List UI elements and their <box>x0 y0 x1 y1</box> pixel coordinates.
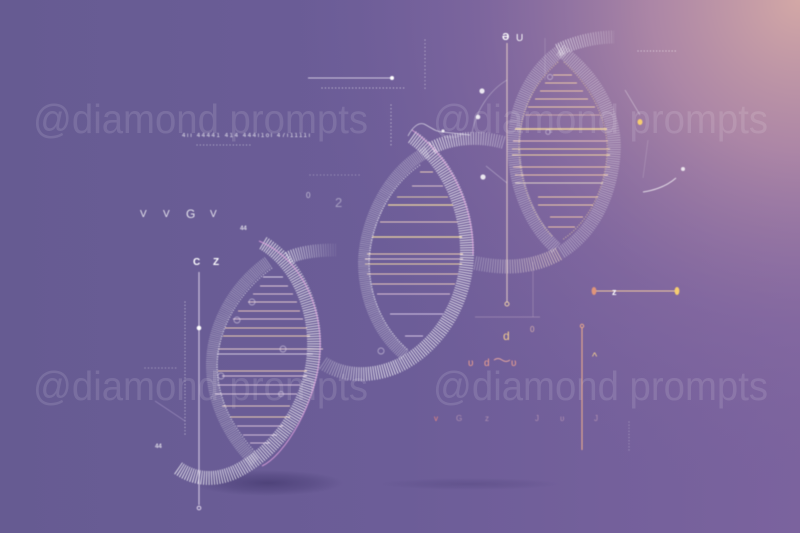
gene range bar: z <box>612 287 617 297</box>
small labels: 0 <box>306 191 311 200</box>
floor shadows <box>193 470 560 496</box>
lower right annotations: υ <box>560 414 564 423</box>
small labels: 44 <box>155 444 162 450</box>
helix 3 annotation axis: Ə <box>502 32 509 43</box>
helix 1 annotation axis: C <box>193 257 200 268</box>
lower right annotations: J <box>594 414 598 423</box>
helix 2 rungs <box>365 172 463 336</box>
small labels <box>155 191 342 450</box>
lower right annotations: v <box>434 414 438 423</box>
helix 3 top arc <box>558 37 614 50</box>
dotted leaders <box>145 40 678 452</box>
helix 2 top arc <box>432 138 505 148</box>
helix 1 right strand <box>178 241 320 478</box>
helix 2 ribbon strands <box>364 130 560 365</box>
lower right annotations: υ <box>468 358 473 369</box>
watermark text: @diamond prompts <box>433 363 768 409</box>
lower right annotations: G <box>456 414 462 423</box>
helix 1 rungs <box>215 277 323 443</box>
helix 3 right strand <box>560 50 614 253</box>
watermark text: @diamond prompts <box>33 363 368 409</box>
helix 3 annotation axis <box>475 32 545 317</box>
helix 1 top fading arc <box>288 250 336 258</box>
watermark text: @diamond prompts <box>33 96 368 142</box>
Greek-like axis letters: V <box>163 209 170 220</box>
top left scale line <box>308 76 394 80</box>
helix 1 annotation axis: Z <box>213 257 219 268</box>
lower right annotations: υ <box>511 358 516 369</box>
Greek-like axis letters: V <box>140 209 147 220</box>
right side annotations <box>625 90 685 192</box>
lower right annotations: J <box>535 414 539 423</box>
tiny caption row: 4ıı 44441 414 444ı1ol 47ı1111ı <box>182 133 312 139</box>
lower right annotations: d <box>503 329 510 343</box>
lower right annotations <box>434 324 598 450</box>
Greek-like axis letters: V <box>210 209 217 220</box>
helix 2 left strand <box>364 152 427 355</box>
upper left annotations <box>140 40 678 452</box>
small labels: 44 <box>240 226 247 232</box>
lower right annotations: 0 <box>530 325 535 334</box>
helix 2 right strand <box>400 130 473 365</box>
small labels: 2 <box>335 195 342 210</box>
helix 1 connector to helix 2 <box>323 363 400 374</box>
helix 2 connector to helix 3 <box>475 253 560 267</box>
gene range bar <box>592 287 679 297</box>
helix 3 annotation axis: U <box>516 33 523 44</box>
helix 3 left strand <box>514 50 562 248</box>
central line nodes and arcs <box>408 80 507 183</box>
Greek-like axis letters: G <box>186 207 195 221</box>
watermark text: @diamond prompts <box>433 96 768 142</box>
helix 1 annotation axis <box>155 257 219 510</box>
helix 1 left strand <box>212 262 272 462</box>
helix 1 ribbon strands <box>178 241 400 478</box>
lower right annotations: ^ <box>592 351 598 363</box>
lower right annotations: d <box>484 358 490 369</box>
helix 3 ribbon strands <box>514 37 614 253</box>
Greek-like axis letters <box>140 207 217 221</box>
watermark text <box>33 96 768 409</box>
small nucleotide markers <box>218 74 552 396</box>
helix 3 rungs <box>512 75 610 227</box>
lower right annotations: z <box>485 414 489 423</box>
